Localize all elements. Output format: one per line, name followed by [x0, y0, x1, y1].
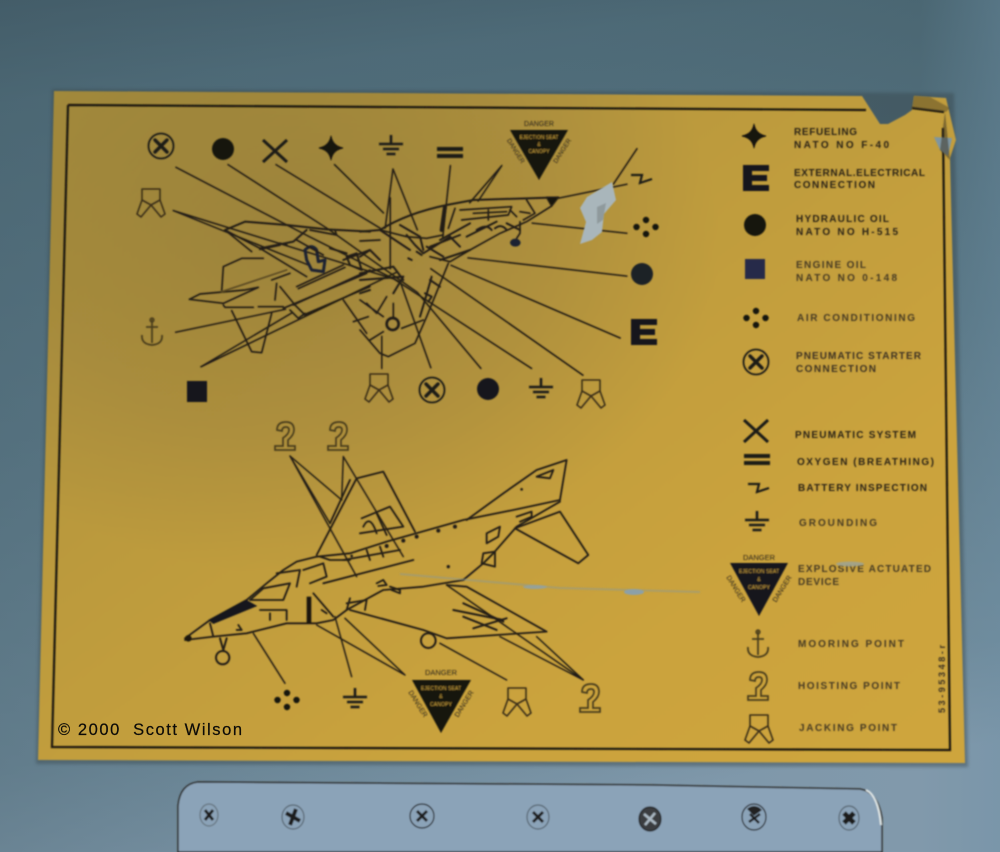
top aircraft diagram — [173, 149, 637, 375]
icon: pneumatic system cross — [263, 140, 287, 162]
icon: grounding bottom — [529, 378, 553, 397]
legend icon: danger triangle — [724, 553, 794, 616]
icon: danger triangle bottom: DANGER — [454, 690, 476, 719]
icon: air conditioning — [274, 690, 300, 710]
icon: refueling star — [319, 136, 343, 160]
legend icon: external electrical — [743, 165, 769, 191]
legend icon: engine oil — [745, 259, 765, 279]
icon: grounding — [343, 688, 367, 707]
icon: jacking — [503, 688, 531, 716]
icon: danger triangle top: CANOPY — [528, 149, 550, 155]
legend text: explosive device: DEVICE — [798, 577, 839, 588]
legend text: hydraulic oil: NATO NO H-515 — [796, 227, 898, 238]
legend text: external electrical: CONNECTION — [794, 180, 875, 191]
legend icon: danger triangle: & — [757, 577, 761, 583]
icon: hoisting 1 — [275, 422, 295, 450]
icon: mooring left — [142, 318, 162, 345]
legend text: engine oil: ENGINE OIL — [796, 260, 866, 271]
airframe outline — [185, 460, 588, 650]
legend icon: hoisting — [748, 672, 768, 700]
icon: danger triangle top: DANGER — [505, 138, 526, 165]
icon: danger triangle bottom: DANGER — [425, 668, 458, 677]
icon: danger triangle bottom — [406, 668, 476, 733]
legend text: external electrical: EXTERNAL.ELECTRICAL — [794, 168, 925, 179]
copyright: © 2000 Scott Wilson — [58, 721, 242, 739]
icon: hoisting right — [580, 684, 600, 712]
legend icon: pneumatic starter — [744, 350, 768, 374]
legend icon: jacking — [745, 715, 773, 743]
legend text: engine oil: NATO NO 0-148 — [796, 273, 897, 284]
legend icon: air conditioning — [743, 308, 769, 328]
icon: jacking bottom — [365, 374, 393, 402]
icon: pneumatic starter bottom — [420, 378, 444, 402]
icon: danger triangle top: EJECTION SEAT — [520, 135, 558, 141]
legend icon: danger triangle: DANGER — [772, 575, 794, 604]
legend text: refueling: REFUELING — [794, 127, 857, 138]
icon: jacking left — [137, 189, 165, 217]
rear half of airframe — [189, 222, 370, 353]
legend text: pneumatic starter: CONNECTION — [796, 364, 876, 375]
icons around top aircraft — [137, 121, 659, 408]
icon: danger triangle bottom: & — [439, 694, 443, 700]
legend text: refueling: NATO NO F-40 — [794, 140, 889, 151]
plate damage: peeled paint and scorched tab — [400, 96, 952, 595]
soft darker shading across upper left of plate — [38, 91, 965, 763]
icon: hoisting 2 — [328, 422, 348, 450]
legend icon: mooring — [748, 630, 768, 657]
legend icon: danger triangle: DANGER — [724, 575, 746, 604]
legend icon: refueling — [742, 124, 766, 148]
screws — [200, 804, 859, 831]
legend text: grounding: GROUNDING — [799, 518, 877, 529]
legend text: air conditioning: AIR CONDITIONING — [797, 313, 915, 324]
leader lines — [253, 456, 583, 683]
icon: grounding — [379, 135, 403, 154]
legend text: pneumatic starter: PNEUMATIC STARTER — [796, 351, 922, 362]
icon: danger triangle top — [505, 121, 573, 180]
legend — [724, 124, 934, 743]
icon: danger triangle bottom: DANGER — [406, 690, 428, 719]
icon: hydraulic dot bottom — [477, 378, 499, 400]
leader lines — [173, 149, 637, 375]
plate shadow — [36, 89, 968, 767]
bottom aircraft diagram — [185, 456, 588, 683]
legend text: battery: BATTERY INSPECTION — [798, 483, 927, 494]
part number: 53-95348-r — [937, 645, 947, 713]
front half of airframe — [360, 197, 558, 357]
legend text: mooring: MOORING POINT — [798, 639, 904, 650]
legend icon: hydraulic oil — [744, 214, 766, 236]
icon: danger triangle top: & — [537, 142, 541, 148]
icon: jacking right — [577, 380, 605, 408]
legend icon: danger triangle: CANOPY — [748, 585, 770, 591]
icons around bottom aircraft — [274, 422, 600, 733]
access panel with screws — [178, 782, 882, 852]
legend icon: danger triangle: DANGER — [743, 553, 776, 562]
legend text: pneumatic system: PNEUMATIC SYSTEM — [795, 430, 916, 441]
legend icon: oxygen — [744, 454, 770, 465]
icon: danger triangle bottom: EJECTION SEAT — [421, 686, 462, 692]
icon: external electrical — [631, 319, 657, 345]
icon: battery — [631, 175, 652, 183]
icon: oxygen equals — [437, 147, 463, 158]
legend text: jacking: JACKING POINT — [799, 723, 897, 734]
icon: danger triangle top: DANGER — [524, 121, 554, 128]
legend icon: battery — [748, 484, 769, 492]
icon: hydraulic oil dot — [212, 138, 234, 160]
icon: air conditioning — [633, 217, 659, 237]
icon: danger triangle bottom: CANOPY — [430, 702, 452, 708]
icon: engine dot — [631, 263, 653, 285]
legend icon: danger triangle: EJECTION SEAT — [739, 569, 780, 575]
icon: pneumatic starter — [148, 134, 174, 158]
yellow data plate — [38, 91, 965, 763]
legend text: explosive device: EXPLOSIVE ACTUATED — [798, 564, 931, 575]
legend text: oxygen: OXYGEN (BREATHING) — [797, 457, 934, 468]
plate inner border — [52, 105, 950, 750]
legend text: hydraulic oil: HYDRAULIC OIL — [796, 214, 889, 225]
legend icon: pneumatic system — [744, 420, 768, 442]
legend icon: grounding — [745, 511, 769, 530]
icon: danger triangle top: DANGER — [552, 137, 573, 165]
legend text: hoisting: HOISTING POINT — [798, 681, 900, 692]
icon: engine oil square — [187, 381, 207, 402]
